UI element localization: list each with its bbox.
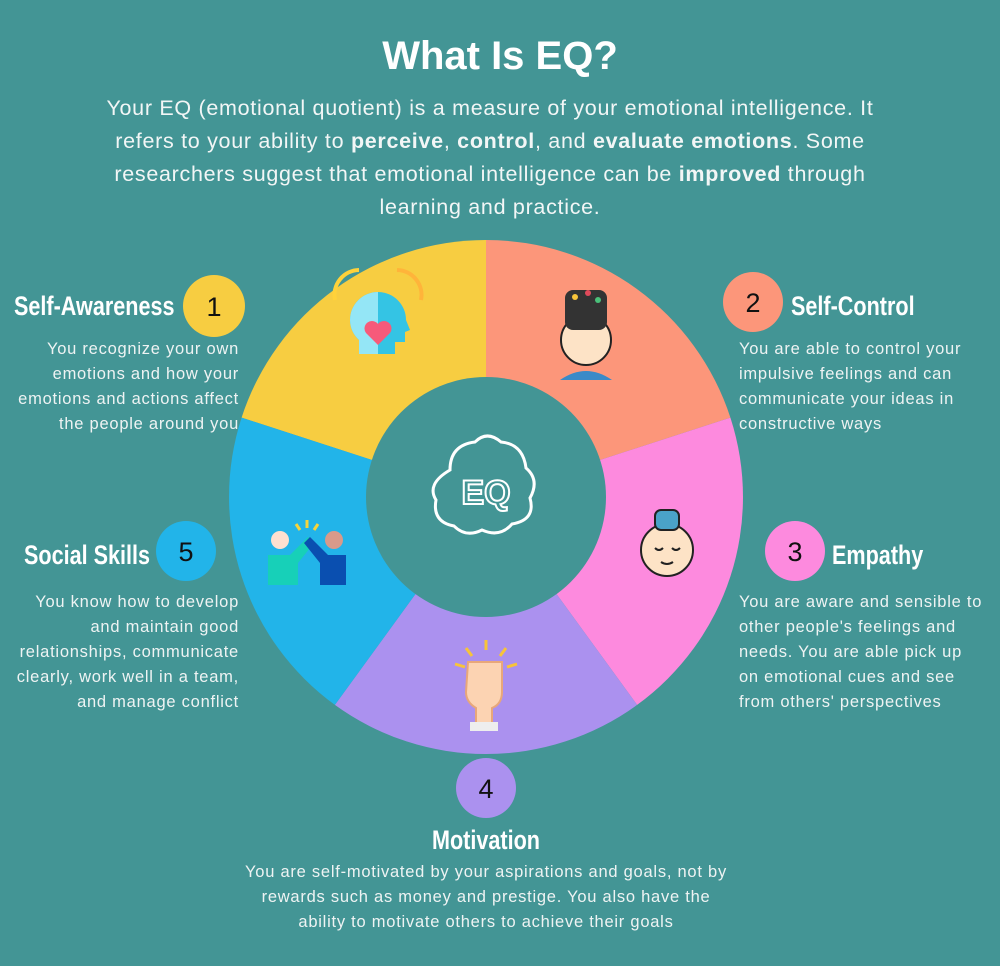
donut chart: 3 bbox=[787, 537, 803, 567]
text: empathy: other people's feelings and bbox=[739, 618, 956, 636]
text: motivation: rewards such as money and prestige. You also have the bbox=[262, 888, 710, 906]
intro text: researchers suggest that emotional intelligence can be improved through bbox=[114, 162, 866, 186]
text: self-awareness: emotions and actions affect bbox=[18, 390, 239, 408]
text: social skills: and manage conflict bbox=[77, 693, 239, 711]
text: motivation: ability to motivate others to achieve their goals bbox=[298, 913, 674, 931]
text: social skills: clearly, work well in a team, bbox=[17, 668, 239, 686]
segment: self-control bbox=[486, 240, 730, 497]
text: social skills: and maintain good bbox=[90, 618, 239, 636]
donut chart: 2 bbox=[745, 288, 761, 318]
text: self-control: You are able to control your bbox=[739, 340, 961, 358]
text: motivation: You are self-motivated by your aspirations and goals, not by bbox=[245, 863, 727, 881]
icon: high five bbox=[268, 520, 346, 585]
segment: empathy bbox=[486, 418, 743, 705]
heading: self-awareness: Self-Awareness bbox=[14, 291, 174, 321]
text: self-awareness: emotions and how your bbox=[53, 365, 239, 383]
intro text: learning and practice. bbox=[380, 195, 600, 219]
donut chart: 4 bbox=[478, 774, 494, 804]
text: social skills: You know how to develop bbox=[35, 593, 239, 611]
text: empathy: from others' perspectives bbox=[739, 693, 942, 711]
icon: calm face bbox=[641, 510, 693, 576]
text: social skills: relationships, communicate bbox=[20, 643, 239, 661]
icon: person meditating with pins bbox=[560, 290, 612, 380]
heading: empathy: Empathy bbox=[832, 540, 923, 570]
text: self-control: constructive ways bbox=[739, 415, 882, 433]
heading: motivation: Motivation bbox=[432, 825, 540, 855]
text: self-control: impulsive feelings and can bbox=[739, 365, 952, 383]
heading: social skills: Social Skills bbox=[24, 540, 150, 570]
icon: EQ brain: EQ bbox=[461, 474, 511, 512]
text: self-control: communicate your ideas in bbox=[739, 390, 954, 408]
intro text bbox=[106, 96, 874, 219]
text: empathy: on emotional cues and see bbox=[739, 668, 955, 686]
segment: social skills bbox=[229, 418, 486, 705]
intro text: Your EQ (emotional quotient) is a measure of your emotional intelligence. It bbox=[106, 96, 874, 120]
donut chart: 5 bbox=[178, 537, 194, 567]
text: social skills bbox=[17, 593, 239, 711]
title: What Is EQ? bbox=[382, 34, 618, 78]
text: empathy bbox=[739, 593, 982, 711]
heading: self-control: Self-Control bbox=[791, 291, 915, 321]
text: self-control bbox=[739, 340, 961, 433]
text: self-awareness bbox=[18, 340, 239, 433]
icon: raised fist bbox=[455, 640, 517, 731]
text: self-awareness: You recognize your own bbox=[47, 340, 239, 358]
text: motivation bbox=[245, 863, 727, 931]
icon: EQ brain bbox=[433, 436, 534, 533]
text: empathy: You are aware and sensible to bbox=[739, 593, 982, 611]
segment: self-awareness bbox=[242, 240, 486, 497]
text: empathy: needs. You are able pick up bbox=[739, 643, 962, 661]
intro text: refers to your ability to perceive, control, and evaluate emotions. Some bbox=[115, 129, 865, 153]
donut chart: 1 bbox=[206, 292, 222, 322]
segment: motivation bbox=[335, 497, 637, 754]
icon: head with heart bbox=[334, 270, 422, 354]
center circle bbox=[366, 377, 606, 617]
number badges bbox=[183, 275, 245, 337]
text: self-awareness: the people around you bbox=[59, 415, 239, 433]
